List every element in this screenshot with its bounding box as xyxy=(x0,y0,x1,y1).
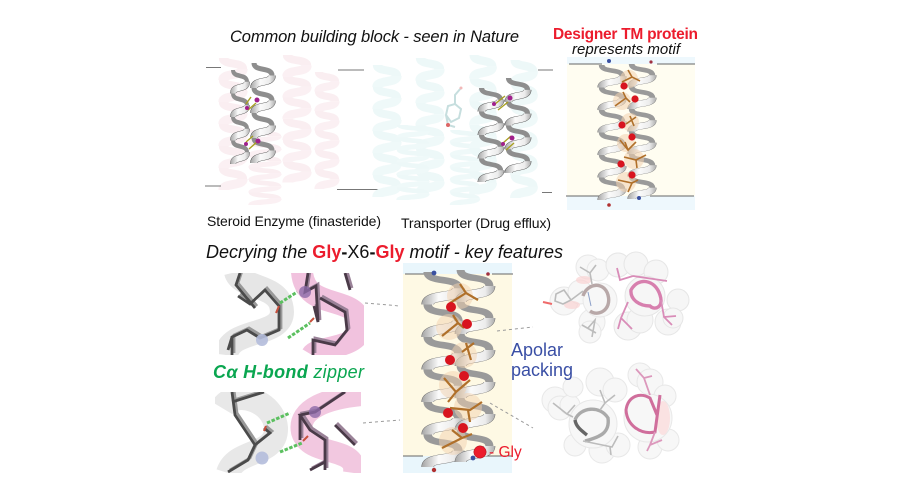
drug molecule sticks xyxy=(446,86,462,127)
van der Waals surface gray helix xyxy=(550,255,617,343)
hydrogen bonds xyxy=(267,413,302,452)
pink ribbon xyxy=(301,395,362,473)
pink ring xyxy=(631,281,661,308)
Gly legend dot xyxy=(474,446,486,458)
gray ring xyxy=(575,409,608,441)
caption: transporter: Transporter (Drug efflux) xyxy=(401,215,551,231)
membrane lines xyxy=(403,274,513,456)
panel: top H-bond close-up xyxy=(226,271,361,355)
backbone sticks pink xyxy=(305,271,352,355)
membrane background xyxy=(403,263,512,473)
gray side chains xyxy=(553,390,618,455)
panel: steroid enzyme structure xyxy=(205,55,381,205)
backbone sticks pink xyxy=(300,390,357,470)
orange side chains xyxy=(615,70,646,192)
faint pink protein helices xyxy=(224,55,335,205)
highlighted residues xyxy=(309,406,321,418)
backbone sticks gray xyxy=(228,390,272,472)
highlighted residues xyxy=(299,286,311,298)
oxygen tips xyxy=(276,306,314,322)
membrane lines xyxy=(538,70,553,192)
gray side chains xyxy=(555,265,596,337)
panel: Gly-X6-Gly motif helix xyxy=(403,263,522,473)
pink side chains xyxy=(617,268,676,329)
faint cyan protein helices xyxy=(378,55,533,205)
panel: top packing cross-section xyxy=(543,252,689,343)
label: apolar packing: packing xyxy=(511,360,573,380)
heading: decrypting the motif: Decrying the Gly-X6-Gly motif - key features xyxy=(206,242,563,262)
backbone sticks gray xyxy=(228,271,281,355)
helix pair xyxy=(482,78,527,182)
gray ribbon xyxy=(226,272,282,355)
surface tint xyxy=(656,401,670,435)
van der Waals surface pink helix xyxy=(624,363,679,459)
hydrogen bonds xyxy=(280,292,310,338)
heading: designer TM protein: Designer TM protein xyxy=(553,26,698,43)
subheading: represents motif: represents motif xyxy=(572,41,682,58)
panel: transporter structure xyxy=(378,55,553,205)
surface tint xyxy=(564,276,592,309)
panel: designer TM protein xyxy=(566,57,695,210)
pink side chains xyxy=(636,369,662,451)
Gly legend label: - Gly xyxy=(489,444,522,461)
glycine red dots xyxy=(443,302,472,433)
label: apolar packing: Apolar xyxy=(511,340,563,360)
van der Waals surface gray helix xyxy=(542,368,630,463)
glycine red dots xyxy=(617,82,639,179)
helix pair xyxy=(602,64,652,200)
helix pair xyxy=(233,63,272,164)
leader lines xyxy=(363,303,533,428)
gray ring xyxy=(583,285,609,313)
pink ribbon xyxy=(302,272,361,355)
panel: bottom packing cross-section xyxy=(542,363,679,463)
apolar side-chain halos xyxy=(613,70,644,192)
termini xyxy=(432,271,490,472)
pink ring xyxy=(626,395,660,433)
title: common building block: Common building block - seen in Nature xyxy=(230,28,519,46)
termini xyxy=(607,59,653,207)
membrane lines xyxy=(566,64,695,196)
label: C-alpha H-bond zipper: Cα H-bond zipper xyxy=(213,362,365,382)
van der Waals surface pink helix xyxy=(606,252,689,340)
apolar side-chain halos xyxy=(436,283,482,455)
helix pair xyxy=(428,270,489,467)
oxygen highlight xyxy=(543,302,552,304)
caption: steroid enzyme: Steroid Enzyme (finasteride) xyxy=(207,213,381,229)
panel: bottom H-bond close-up xyxy=(222,390,362,473)
gray ribbon xyxy=(222,398,276,473)
membrane background xyxy=(567,57,695,210)
membrane lines xyxy=(205,68,381,190)
orange side chains xyxy=(442,284,482,448)
oxygen tips xyxy=(264,426,308,441)
